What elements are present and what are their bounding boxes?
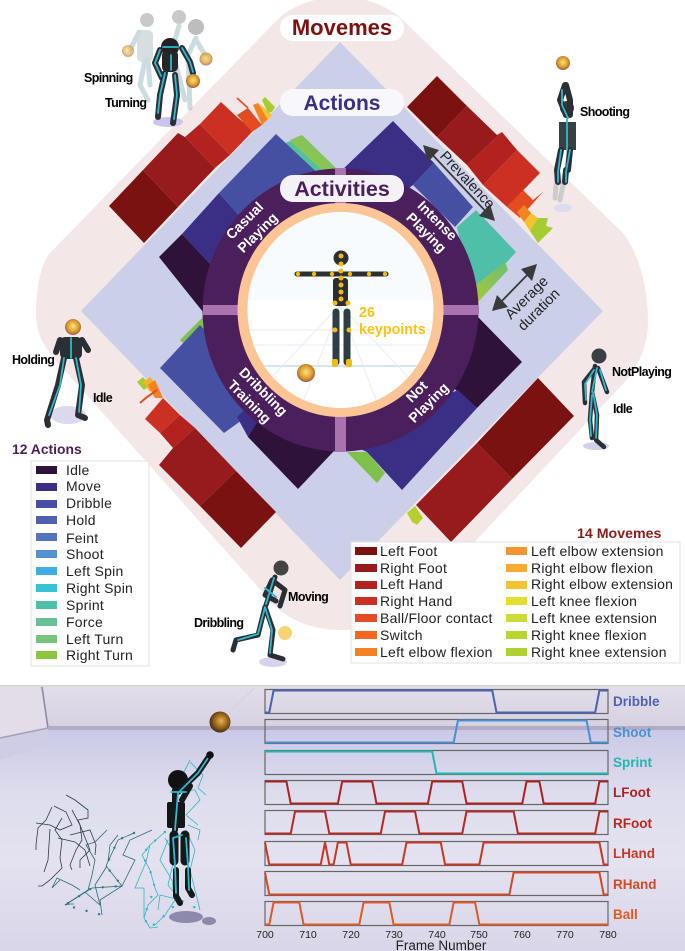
legend: movemes: Switch — [380, 627, 423, 643]
legend: movemes: Right Foot — [380, 560, 447, 576]
legend: actions: Sprint — [66, 597, 104, 613]
axis: frame number: 720 — [342, 929, 360, 941]
axis: frame number: 770 — [556, 929, 574, 941]
arrow: average duration: Average — [503, 274, 552, 323]
legend: movemes: Right Hand — [380, 593, 453, 609]
axis: frame number: 750 — [470, 929, 488, 941]
chart: left hand timeline: LHand — [613, 846, 655, 861]
label: Idle right: Idle — [613, 402, 633, 416]
legend: actions: Move — [66, 478, 101, 494]
legend: actions: Idle — [66, 462, 90, 478]
icon: center ball — [297, 364, 315, 382]
ring labels: Intense — [415, 197, 461, 244]
axis: frame number: 710 — [299, 929, 317, 941]
legend: movemes: Right knee flexion — [531, 627, 647, 643]
legend: movemes: Left elbow extension — [531, 543, 664, 559]
ring labels: Dribbling — [236, 364, 291, 419]
chart: dribble timeline — [265, 690, 660, 714]
label: Idle left: Idle — [93, 391, 113, 405]
heading: 12 Actions: 12 Actions — [12, 441, 82, 457]
legend: movemes: Right knee extension — [531, 644, 667, 660]
ring labels — [223, 197, 461, 426]
arrow: prevalence: Prevalence — [436, 148, 498, 212]
pill: Actions: Actions — [303, 92, 381, 115]
legend: movemes: Left Hand — [380, 576, 443, 592]
chart: movemes bottom-left bars — [137, 377, 276, 548]
skeleton motion trail — [36, 760, 206, 928]
legend: actions: Force — [66, 614, 103, 630]
arrow: prevalence — [423, 145, 498, 221]
label: Dribbling: Dribbling — [194, 616, 243, 630]
legend: movemes: Ball/Floor contact — [380, 610, 493, 626]
panel: actions diamond — [81, 42, 603, 580]
pill: Activities: Activities — [294, 177, 390, 201]
axis: frame number: 780 — [599, 929, 617, 941]
label: Moving: Moving — [288, 590, 328, 604]
pill: Actions — [280, 89, 404, 116]
legend: movemes: Right elbow flexion — [531, 560, 653, 576]
axis: frame number: 700 — [256, 929, 274, 941]
activities ring — [202, 168, 478, 452]
ring labels: Playing — [405, 379, 452, 426]
keypoints label: keypoints — [359, 322, 426, 338]
figure: spinning and turning — [122, 10, 212, 127]
legend: movemes: Left knee flexion — [531, 593, 637, 609]
chart: movemes top-left bars — [109, 97, 275, 243]
legend: actions: Hold — [66, 512, 96, 528]
ring labels: Not — [403, 377, 431, 405]
legend: actions: Left Turn — [66, 631, 124, 647]
chart: actions bottom-left bars — [160, 317, 345, 489]
figure: shooting player with ball — [167, 688, 254, 925]
chart: actions top-right bars — [340, 121, 516, 302]
label: Holding: Holding — [12, 353, 54, 367]
chart: left foot timeline — [265, 780, 651, 804]
legend: movemes: Left Foot — [380, 543, 438, 559]
legend: movemes: Right elbow extension — [531, 576, 673, 592]
legend: actions: Right Spin — [66, 580, 133, 596]
chart: shoot timeline: Shoot — [613, 725, 652, 740]
chart: movemes bottom-right bars — [407, 378, 574, 542]
chart: left hand timeline — [265, 842, 655, 866]
ring labels: Playing — [403, 209, 450, 256]
keypoints label: 26 — [359, 305, 375, 321]
keypoints label — [359, 305, 426, 338]
chart: actions top-left bars — [159, 134, 340, 312]
arrow: average duration: duration — [515, 286, 563, 334]
chart: shoot timeline — [265, 720, 652, 744]
label: Spinning: Spinning — [84, 71, 133, 85]
chart: right foot timeline: RFoot — [613, 816, 652, 831]
arrow: average duration — [492, 264, 563, 334]
legend: actions: Left Spin — [66, 563, 124, 579]
heading: 14 Movemes: 14 Movemes — [577, 526, 661, 542]
floor grid in circle — [248, 212, 433, 400]
chart: right hand timeline — [265, 872, 656, 896]
chart: ball timeline: Ball — [613, 907, 638, 922]
pill: Movemes: Movemes — [292, 15, 392, 40]
legend: actions: Feint — [66, 530, 98, 546]
chart: right hand timeline: RHand — [613, 877, 656, 892]
chart: sprint timeline — [265, 750, 653, 774]
panel: court scene background — [0, 685, 685, 951]
center T-pose figure with keypoints — [296, 250, 387, 367]
label: Shooting: Shooting — [580, 105, 629, 119]
figure: dribbling moving — [233, 560, 292, 667]
figure: holding idle — [47, 319, 88, 425]
chart: right foot timeline — [265, 810, 652, 834]
legend: actions — [31, 461, 149, 666]
label: NotPlaying: NotPlaying — [612, 365, 671, 379]
legend: actions: Dribble — [66, 495, 112, 511]
legend: actions: Shoot — [66, 546, 104, 562]
label: Turning: Turning — [105, 96, 146, 110]
legend: movemes: Left elbow flexion — [380, 644, 493, 660]
ring labels: Playing — [234, 209, 281, 256]
legend: movemes — [351, 542, 680, 663]
axis: frame number — [256, 929, 617, 951]
legend: movemes: Left knee extension — [531, 610, 657, 626]
chart: dribble timeline: Dribble — [613, 694, 660, 709]
axis: frame number: 740 — [428, 929, 446, 941]
axis: frame number: 760 — [513, 929, 531, 941]
figure: not playing idle — [583, 348, 609, 450]
pill: Activities — [280, 175, 404, 202]
axis: frame number: 730 — [385, 929, 403, 941]
chart: actions bottom-right bars — [340, 310, 522, 490]
chart: left foot timeline: LFoot — [613, 785, 651, 800]
panel: movemes rounded diamond — [36, 0, 648, 630]
chart: ball timeline — [265, 902, 638, 926]
ring labels: Casual — [223, 199, 266, 242]
legend: actions: Right Turn — [66, 647, 133, 663]
figure: shooting — [554, 56, 576, 212]
chart: sprint timeline: Sprint — [613, 755, 653, 770]
ring labels: Training — [225, 377, 274, 426]
chart: movemes top-right bars — [407, 76, 553, 243]
